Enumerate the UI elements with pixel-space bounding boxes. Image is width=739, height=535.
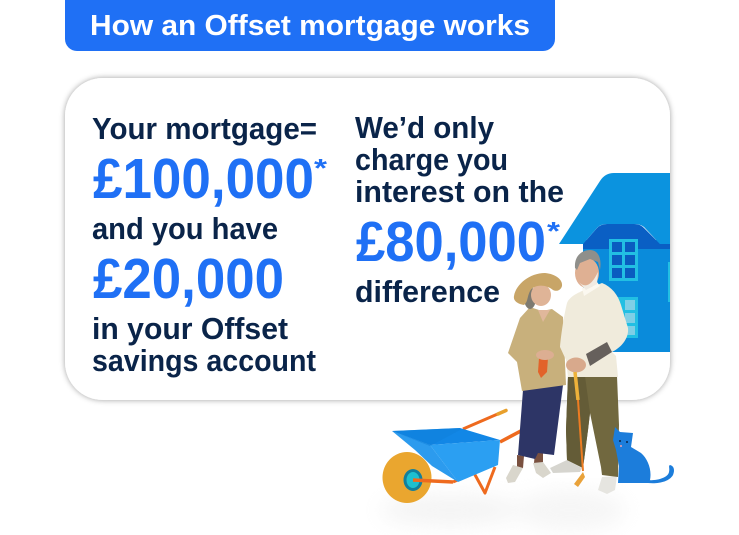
tray (392, 428, 500, 445)
text block: your mortgage: and you have (92, 211, 278, 246)
neck (582, 282, 600, 296)
shoes (550, 460, 582, 473)
axle (413, 480, 453, 482)
wheel (382, 452, 432, 503)
hair (524, 287, 536, 309)
golf club (575, 372, 578, 400)
frame leg (453, 467, 495, 493)
text block: your mortgage: savings account (92, 343, 316, 378)
shoes (506, 462, 551, 483)
floor shadow (380, 490, 625, 530)
text block: interest charged: £80,000 (356, 210, 546, 274)
panel: white explanation card (65, 78, 670, 400)
icon: blue cat (613, 427, 674, 483)
icon: blue house (559, 173, 673, 352)
text block: your mortgage: in your Offset (92, 311, 288, 346)
scarf accent (538, 358, 548, 378)
sweater (560, 283, 628, 377)
wheelbarrow (382, 410, 543, 503)
trousers (566, 376, 619, 477)
text block: interest charged: We’d only (355, 110, 495, 145)
trousers (518, 385, 563, 459)
text block: interest charged: * (547, 216, 561, 246)
text block: your mortgage: £100,000 (93, 147, 314, 211)
title banner (65, 0, 555, 51)
woman (506, 273, 566, 483)
icon: lower window (618, 297, 638, 338)
man (550, 250, 628, 494)
handles (463, 413, 500, 429)
hands (536, 350, 554, 360)
text block: interest charged: difference (355, 274, 500, 309)
text block: interest charged (355, 110, 564, 309)
sun hat (514, 273, 562, 305)
legs (517, 452, 543, 468)
text block: interest charged: interest on the (355, 174, 564, 209)
icon: upper window (609, 239, 638, 281)
text block: your mortgage: Your mortgage= (92, 111, 317, 146)
text block: your mortgage: £20,000 (93, 247, 284, 311)
hands (566, 358, 586, 372)
face (531, 284, 551, 306)
text block: your mortgage: * (314, 153, 328, 183)
text block: interest charged: charge you (355, 142, 508, 177)
title banner: How an Offset mortgage works (90, 10, 530, 42)
text block: your mortgage (92, 111, 328, 378)
forearm tattoo sleeve (586, 342, 612, 366)
head (575, 258, 599, 288)
shirt (508, 307, 566, 391)
